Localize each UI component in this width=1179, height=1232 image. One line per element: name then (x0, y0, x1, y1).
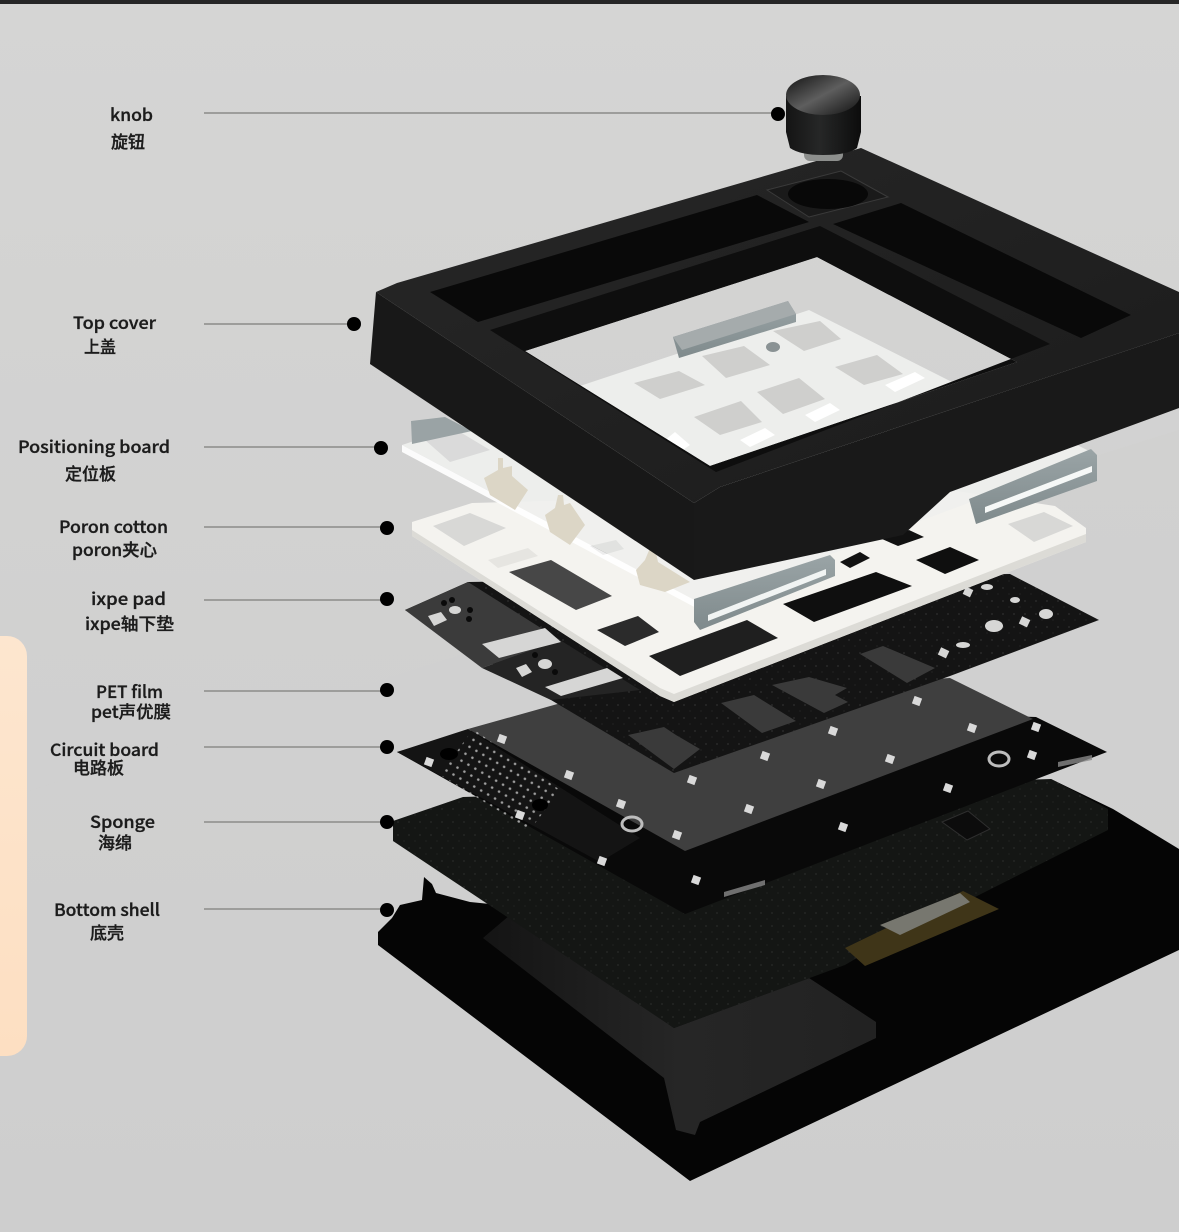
callout: top cover: Top cover (73, 309, 156, 334)
stabilizer: back (673, 301, 796, 358)
cover right slot (833, 203, 1131, 338)
layer: sponge (393, 779, 1108, 1028)
board key openings (425, 321, 903, 462)
callout: PET film (91, 678, 394, 723)
callout: ixpe pad: ixpe pad (91, 585, 166, 610)
cover left side (370, 292, 694, 580)
knob socket (767, 171, 888, 217)
poron openings (433, 512, 1073, 676)
layer: ixpe pad and PET film (405, 574, 1099, 773)
pad openings (428, 584, 1053, 696)
callout: bottom shell (54, 896, 394, 944)
pad small black holes (441, 597, 558, 675)
shell inner floor (483, 915, 876, 1135)
callout: bottom shell: Bottom shell (54, 896, 160, 921)
callout: positioning board (18, 433, 388, 485)
knob (786, 75, 861, 161)
callout: ixpe pad: ixpe轴下垫 (85, 610, 174, 635)
callout: sponge: 海绵 (98, 829, 132, 854)
callout: PET film: PET film (96, 678, 163, 703)
callout: top cover: 上盖 (84, 333, 116, 358)
callout: positioning board: Positioning board (18, 433, 170, 458)
callout: positioning board: 定位板 (65, 460, 116, 485)
board screw (766, 342, 780, 352)
circuit board grey area (468, 678, 1033, 851)
circuit board pads (424, 696, 1041, 885)
callout: poron cotton (59, 513, 394, 561)
callout: knob (110, 101, 785, 153)
callout: knob: knob (110, 101, 153, 126)
cover left slot (430, 195, 809, 322)
pad raised rectangles (628, 646, 935, 769)
battery (845, 891, 999, 966)
stabilizer: right (969, 449, 1097, 524)
layer: bottom shell (378, 779, 1179, 1181)
circuit board dotted area (397, 729, 640, 862)
peach side panel (0, 636, 27, 1056)
callout: top cover (73, 309, 361, 358)
top cover (370, 148, 1179, 580)
callout: poron cotton: poron夹心 (72, 536, 157, 561)
cover top face (376, 148, 1179, 503)
stabilizer: front (694, 555, 835, 630)
layer: poron cotton frame (412, 490, 1086, 702)
callout: sponge: Sponge (90, 808, 155, 833)
callout: bottom shell: 底壳 (90, 919, 124, 944)
callout: ixpe pad (85, 585, 394, 635)
layer: circuit board (397, 678, 1107, 914)
pad left grey corner (405, 582, 560, 668)
callout: circuit board: 电路板 (73, 754, 124, 779)
board small white slots (665, 372, 925, 452)
callout: poron cotton: Poron cotton (59, 513, 168, 538)
stabilizer: left (411, 417, 472, 444)
callout: circuit board (50, 736, 394, 779)
callout: knob: 旋钮 (111, 128, 145, 153)
callout: sponge (90, 808, 394, 854)
switch sockets (484, 458, 690, 592)
top dark strip (0, 0, 1179, 4)
cover right side (694, 333, 1179, 580)
layer: positioning board (402, 310, 1097, 610)
cover inner recess (490, 226, 1050, 472)
callout: circuit board: Circuit board (50, 736, 159, 761)
callout: PET film: pet声优膜 (91, 698, 171, 723)
